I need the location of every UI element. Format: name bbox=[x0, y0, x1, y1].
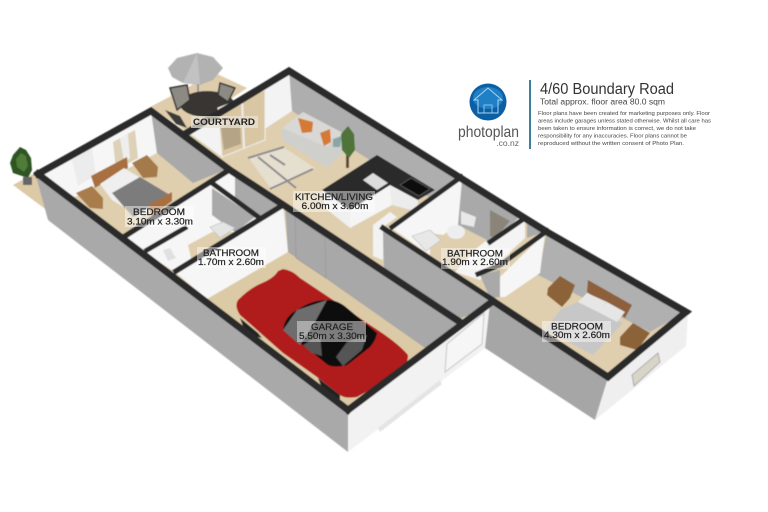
label: kitchen living: 6.00m x 3.60m bbox=[302, 201, 368, 211]
label: bedroom: 3.10m x 3.30m bbox=[127, 216, 193, 226]
closet and bathroom one bbox=[120, 168, 283, 272]
icon: house in blue circle bbox=[470, 84, 506, 120]
address heading: 4/60 Boundary Road bbox=[540, 81, 674, 98]
car bbox=[236, 269, 408, 402]
label: bathroom two bbox=[441, 248, 510, 269]
label: kitchen living: KITCHEN/LIVING bbox=[295, 192, 373, 202]
disclaimer text: Floor plans have been created for marketing purposes only. Floor bbox=[538, 111, 710, 117]
logo: photoplan: .co.nz bbox=[496, 138, 519, 148]
disclaimer text bbox=[538, 111, 711, 147]
label: bedroom: BEDROOM bbox=[133, 207, 185, 217]
disclaimer text: areas include garages unless stated otherwise. Whilst all care has bbox=[538, 118, 711, 124]
label: bedroom two: 4.30m x 2.60m bbox=[544, 330, 610, 340]
house footprint floor bbox=[38, 71, 686, 410]
courtyard with umbrella and table bbox=[150, 53, 247, 130]
rug bbox=[248, 147, 315, 190]
label: courtyard: COURTYARD bbox=[193, 117, 256, 127]
nightstand top bbox=[547, 276, 575, 307]
label: bedroom two bbox=[542, 321, 611, 342]
label: bathroom one: 1.70m x 2.60m bbox=[198, 257, 264, 267]
label: bathroom one bbox=[197, 247, 266, 268]
room: bedroom two bbox=[500, 232, 686, 355]
logo: photoplan: photoplan bbox=[458, 124, 519, 141]
bed bbox=[76, 155, 172, 217]
closet between rooms bbox=[455, 220, 543, 298]
bed bbox=[545, 302, 623, 355]
label: bedroom two: BEDROOM bbox=[551, 322, 603, 332]
label: garage: 5.50m x 3.30m bbox=[299, 331, 365, 341]
room: bedroom one bbox=[38, 111, 230, 217]
room: garage bbox=[175, 205, 460, 410]
label: kitchen living bbox=[293, 191, 375, 212]
outer walls bbox=[35, 172, 688, 452]
disclaimer text: responsibility for any inaccuracies. Floor plans cannot be bbox=[538, 134, 687, 140]
wall tops bbox=[38, 71, 686, 410]
left garden patch with plant bbox=[10, 147, 48, 211]
room: bathroom two bbox=[390, 178, 527, 272]
floor area: Total approx. floor area 80.0 sqm bbox=[540, 98, 665, 106]
disclaimer text: reproduced without the written consent of Photo Plan. bbox=[538, 141, 684, 147]
sofa bbox=[282, 112, 343, 168]
nightstand bottom bbox=[620, 323, 650, 350]
label: bathroom two: BATHROOM bbox=[447, 248, 503, 258]
label: bedroom bbox=[125, 206, 194, 227]
disclaimer text: been taken to ensure information is correct, we do not take bbox=[538, 126, 696, 132]
label: garage: GARAGE bbox=[311, 322, 353, 332]
divider bbox=[529, 80, 531, 149]
label: garage bbox=[297, 321, 366, 342]
logo: photoplan bbox=[458, 84, 519, 148]
label: bathroom one: BATHROOM bbox=[203, 248, 259, 258]
room: kitchen living bbox=[188, 70, 493, 319]
kitchen counter bbox=[322, 155, 435, 260]
plant bbox=[341, 126, 355, 168]
label: bathroom two: 1.90m x 2.60m bbox=[442, 257, 508, 267]
3D floor plan bbox=[10, 53, 688, 452]
